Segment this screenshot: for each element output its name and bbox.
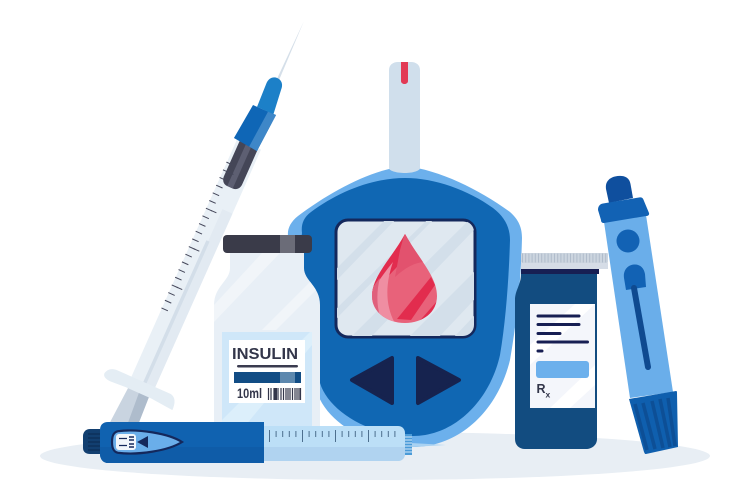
meter screen: [336, 220, 475, 337]
Rx mark: R: [536, 382, 546, 396]
left button: [352, 358, 392, 403]
meter inner body: [300, 178, 510, 436]
vial body: [214, 253, 320, 432]
barrel: [128, 139, 261, 394]
pen body: [604, 215, 673, 398]
nozzle: [256, 75, 288, 114]
clear cartridge: [264, 426, 405, 461]
pen needle: [411, 443, 446, 447]
bottle lid: [521, 253, 608, 269]
pen dial: [616, 230, 640, 252]
test strip: [389, 62, 420, 173]
cap: [233, 103, 276, 152]
prescription label: x: [546, 390, 550, 400]
dark end cap: [83, 429, 100, 454]
dose arrow: [137, 436, 148, 448]
horizontal insulin pen: [83, 422, 446, 463]
medicine: [221, 140, 258, 191]
insulin vial: [214, 235, 320, 432]
pen grip: [629, 391, 678, 454]
flange: [102, 366, 178, 410]
pen slider: [624, 264, 646, 290]
bottle neck band: [521, 269, 599, 274]
upright injection pen: [598, 176, 678, 454]
pen top button: [606, 176, 633, 203]
syringe: [87, 5, 339, 443]
pen slot: [634, 288, 648, 367]
blood drop: [372, 234, 437, 323]
strip blood mark: [401, 62, 408, 84]
plunger: [110, 381, 153, 433]
blood glucose meter: [288, 62, 522, 447]
vial cap: [223, 235, 312, 253]
pen barrel: [100, 422, 264, 463]
volume text: 10ml: [237, 386, 262, 401]
needle: [277, 21, 305, 80]
ground shadow: [40, 432, 710, 480]
pen collar: [598, 197, 649, 223]
pill bottle: [515, 253, 608, 449]
scale ticks: [163, 163, 230, 312]
bottle body: [515, 274, 597, 449]
pen tip: [405, 434, 412, 455]
vial label: [229, 340, 305, 403]
barcode: [268, 388, 300, 400]
dose window: [112, 430, 182, 454]
meter outer shell: [288, 166, 522, 447]
prescription label: [530, 304, 595, 408]
label title: INSULIN: [232, 346, 298, 363]
liquid band: [222, 332, 312, 432]
right button: [418, 358, 459, 403]
